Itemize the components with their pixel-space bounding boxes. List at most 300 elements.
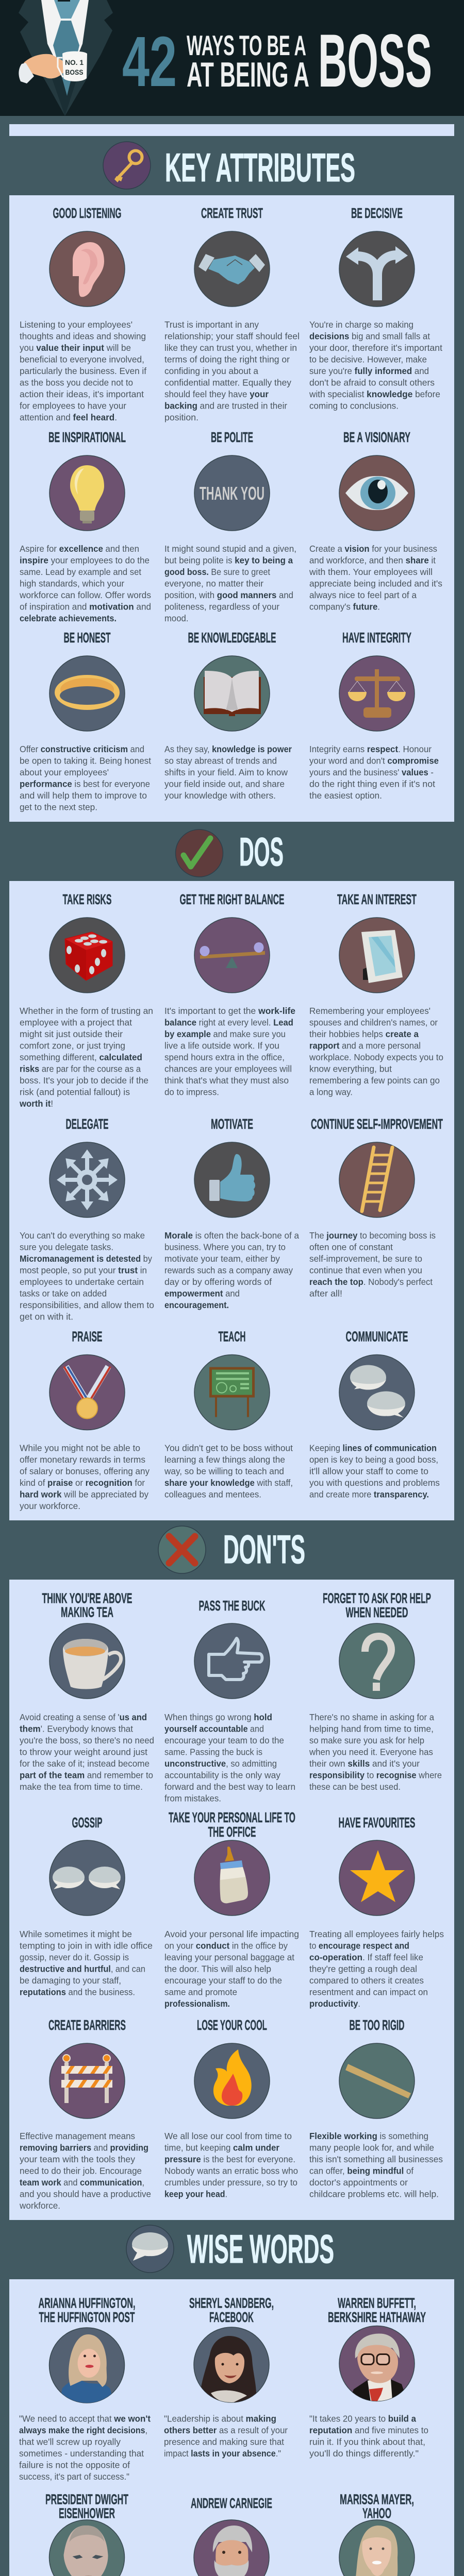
text block: workplace. Nobody expects you to: [309, 1052, 443, 1062]
text block: Avoid your personal life impacting: [164, 1929, 299, 1939]
quote: [164, 2413, 288, 2459]
icon: star: [339, 1840, 415, 1916]
card: delegate: [20, 1116, 154, 1322]
section heading: wise words: [126, 2225, 334, 2273]
text block: by example and make sure you: [164, 1029, 286, 1039]
card: be honest: [20, 630, 151, 812]
text block: [309, 1712, 442, 1792]
text block: empowerment and: [164, 1288, 240, 1298]
text block: appreciate being included and it's: [309, 578, 442, 588]
text block: high standards, which your: [20, 578, 124, 588]
heading: [38, 2295, 135, 2325]
text block: you with questions and problems: [309, 1478, 440, 1488]
heading: WHEN NEEDED: [345, 1604, 408, 1620]
text block: When things go wrong hold: [164, 1712, 272, 1722]
icon: picture frame: [339, 918, 415, 993]
icon: radiating arrows: [49, 1142, 125, 1217]
card: take your personal life to the office: [164, 1809, 299, 2009]
section heading: dos: DOS: [239, 829, 284, 874]
text block: company's future.: [309, 602, 380, 612]
text block: offer monetary rewards in terms: [20, 1454, 145, 1465]
card: motivate: [164, 1116, 299, 1310]
text block: [164, 1230, 299, 1310]
text block: [20, 744, 151, 812]
text block: You're in charge so making: [309, 319, 413, 330]
text block: most people, so put your trust in: [20, 1265, 147, 1276]
text block: and will help them to improve to: [20, 790, 147, 801]
portrait: [339, 2326, 415, 2402]
heading: EISENHOWER: [59, 2505, 115, 2521]
text block: like they can trust you, whether in: [164, 343, 297, 353]
text block: the easiest option.: [309, 790, 382, 801]
text block: decisions big and small falls at: [309, 331, 430, 341]
text block: backing and are trusted in their: [164, 401, 287, 411]
portrait: [194, 2327, 269, 2403]
text block: your team with the tools they: [20, 2154, 135, 2164]
text block: responsibility to recognise where: [309, 1770, 442, 1781]
quote: always make the right decisions,: [19, 2425, 147, 2435]
text block: on your conduct in the office by: [164, 1940, 288, 1951]
text block: performance is best for everyone: [20, 779, 150, 789]
text block: way, so be willing to teach and: [164, 1466, 284, 1477]
icon: flame: [194, 2043, 270, 2119]
illustration: boss in suit holding mug: NO. 1: [65, 58, 84, 66]
text block: Keeping lines of communication: [309, 1443, 437, 1453]
text block: Micromanagement is detested by: [20, 1253, 152, 1264]
text block: reputations and the business.: [20, 1987, 135, 1997]
heading: FACEBOOK: [209, 2309, 254, 2325]
text block: unconstructive, so admitting: [164, 1758, 277, 1769]
heading: [169, 1809, 295, 1840]
card: teach: TEACH: [219, 1328, 245, 1345]
text block: of inspiration and motivation and: [20, 602, 151, 612]
text block: as the boss you decide not to: [20, 377, 133, 387]
quote: others better as a result of your: [164, 2425, 288, 2435]
icon: open book: [194, 656, 270, 731]
text block: to throw your weight around just: [20, 1747, 147, 1757]
text block: Offer constructive criticism and: [20, 744, 144, 754]
text block: beneficial to everyone involved,: [20, 354, 144, 365]
text block: resentment and can impact on: [309, 1987, 428, 1997]
text block: open is key to being a good boss,: [309, 1454, 438, 1465]
text block: position.: [164, 412, 198, 422]
text block: celebrate achievements.: [20, 613, 117, 623]
text block: for the sake of it; instead become: [20, 1758, 150, 1769]
text block: make the tea from time to time.: [20, 1782, 143, 1792]
text block: leaving your personal baggage at: [164, 1952, 294, 1962]
quote: that we'll screw up royally: [19, 2437, 121, 2447]
text block: their own skills and it's your: [309, 1758, 420, 1769]
text block: childcare problems etc. will help.: [309, 2189, 439, 2199]
text block: for employees to have your: [20, 401, 126, 411]
icon: thank you: THANK YOU: [200, 483, 264, 504]
card: pass the buck: [164, 1598, 295, 1803]
card: get the right balance: [164, 891, 295, 1097]
text block: your knowledge with others.: [164, 790, 276, 801]
text block: your workforce.: [20, 1501, 80, 1511]
text block: good boss. Be sure to greet: [164, 567, 270, 577]
card: arianna huffington: [19, 2295, 151, 2482]
text block: confidential matter. Equally they: [164, 377, 291, 387]
icon: balance seesaw: [194, 918, 270, 993]
text block: do to impress.: [164, 1087, 219, 1097]
card: dwight eisenhower: [45, 2494, 128, 2576]
text block: [164, 2131, 298, 2199]
text block: There's no shame in asking for a: [309, 1712, 434, 1722]
text block: spend hours extra in the office,: [164, 1052, 285, 1062]
icon: question mark: [339, 1623, 415, 1699]
card: be a visionary: [309, 429, 442, 612]
text block: [20, 1443, 150, 1511]
icon: tea cup: [49, 1623, 125, 1699]
text block: It might sound stupid and a given,: [164, 544, 296, 554]
text block: position, with good manners and: [164, 590, 293, 600]
text block: and you should have a productive: [20, 2189, 151, 2199]
card: pass the buck: PASS THE BUCK: [199, 1598, 265, 1614]
text block: their hobbies helps create a: [309, 1029, 419, 1039]
text block: Effective management means: [20, 2131, 135, 2141]
icon: ear: [49, 231, 125, 307]
text block: this isn't something all businesses: [309, 2154, 443, 2164]
text block: Morale is often the back-bone of a: [164, 1230, 299, 1241]
text block: Avoid creating a sense of 'us and: [20, 1712, 147, 1722]
text block: action their ideas, it's important: [20, 389, 144, 399]
text block: encouragement.: [164, 1300, 229, 1310]
card: teach: [164, 1328, 293, 1499]
text block: While you might not be able to: [20, 1443, 140, 1453]
heading: [189, 2295, 274, 2325]
text block: attention and feel heard.: [20, 412, 117, 422]
text block: day or by offering words of: [164, 1277, 272, 1287]
text block: these can be best used.: [309, 1782, 401, 1792]
text block: balance right at every level. Lead: [164, 1017, 293, 1027]
icon: ladder: [339, 1142, 415, 1217]
card: gossip: GOSSIP: [72, 1815, 102, 1831]
icon: thank you: [194, 455, 270, 531]
icon: speech bubble: [126, 2225, 174, 2273]
text block: workforce can follow. Offer words: [19, 590, 151, 600]
card: communicate: [309, 1328, 440, 1499]
portrait: [49, 2328, 125, 2404]
card: motivate: MOTIVATE: [211, 1116, 253, 1132]
quote: "We need to accept that we won't: [19, 2413, 151, 2424]
quote: "It takes 20 years to build a: [309, 2413, 416, 2424]
text block: same. Lead by example and set: [20, 567, 141, 577]
heading: MAKING TEA: [61, 1604, 113, 1620]
icon: eye: [339, 455, 415, 531]
text block: [309, 2131, 443, 2199]
text block: should feel they have your: [164, 389, 269, 399]
card: continue self-improvement: [309, 1116, 443, 1298]
text block: [309, 1230, 436, 1298]
text block: [20, 1230, 154, 1322]
text block: your word and don't compromise: [309, 755, 439, 766]
icon: thumbs up: [194, 1142, 270, 1217]
heading: [42, 1590, 132, 1620]
text block: encourage your team to do the: [164, 1735, 284, 1745]
text block: While sometimes it might be: [20, 1929, 132, 1939]
text block: helping hand from time to time,: [309, 1724, 434, 1734]
text block: same. Passing the buck is: [164, 1747, 262, 1757]
text block: Flexible working is something: [309, 2131, 428, 2141]
title: WAYS TO BE A: [187, 29, 306, 61]
text block: [20, 1712, 154, 1792]
text block: [164, 1443, 293, 1499]
text block: Remembering your employees': [309, 1006, 430, 1016]
panel: key attributes: [9, 195, 454, 822]
card: praise: [20, 1328, 150, 1511]
section heading: don'ts: DON'TS: [223, 1527, 305, 1572]
text block: [309, 544, 442, 612]
heading: THINK YOU'RE ABOVE: [42, 1590, 132, 1606]
icon: check mark: [175, 829, 223, 877]
icon: blackboard: [194, 1355, 270, 1430]
title: AT BEING A: [187, 55, 309, 94]
text block: team work and communication,: [20, 2177, 144, 2188]
illustration: boss in suit holding mug: [19, 0, 113, 116]
card: be inspirational: BE INSPIRATIONAL: [48, 429, 126, 445]
text block: [19, 544, 151, 623]
card: be too rigid: [309, 2017, 443, 2199]
text block: might sit just outside their: [20, 1029, 123, 1039]
header banner: [0, 0, 464, 116]
text block: We all lose our cool from time to: [164, 2131, 292, 2141]
text block: live a life outside work. If you: [164, 1041, 279, 1051]
text block: self-improvement, be sure to: [309, 1253, 422, 1264]
text block: yours and the business' values -: [309, 767, 434, 777]
card: be too rigid: BE TOO RIGID: [350, 2017, 404, 2033]
text block: tempting to join in with idle office: [20, 1940, 153, 1951]
icon: forked arrows: [339, 231, 415, 307]
text block: thoughts and ideas and showing: [20, 331, 146, 341]
text block: encourage your staff to do the: [164, 1975, 282, 1986]
text block: confiding in you about a: [164, 366, 258, 376]
illustration: boss in suit holding mug: BOSS: [65, 68, 84, 76]
text block: The journey to becoming boss is: [309, 1230, 436, 1241]
text block: professionalism.: [164, 1998, 230, 2009]
card: good listening: [20, 205, 146, 422]
heading: [328, 2295, 426, 2325]
text block: you're the boss, so there's no need: [20, 1735, 154, 1745]
text block: worth it!: [19, 1098, 53, 1109]
card: gossip: [20, 1815, 153, 1997]
heading: ARIANNA HUFFINGTON,: [38, 2295, 135, 2311]
text block: something different, calculated: [20, 1052, 142, 1062]
text block: doctor's appointments or: [309, 2177, 408, 2188]
card: marissa mayer: [339, 2494, 415, 2576]
text block: crumbles under pressure, so try to: [164, 2177, 297, 2188]
card: be decisive: [309, 205, 442, 411]
card: have integrity: [309, 630, 439, 801]
text block: It's important to get the work-life: [164, 1006, 295, 1016]
text block: a long way.: [309, 1087, 353, 1097]
card: be honest: BE HONEST: [64, 630, 110, 646]
text block: gossip, never do it. Gossip is: [20, 1952, 129, 1962]
quote: [19, 2413, 151, 2482]
quote: ruin it. If you think about that,: [309, 2437, 425, 2447]
quote: success, it's part of success.": [19, 2471, 129, 2482]
text block: [19, 2131, 151, 2211]
text block: spouses and children's names, or: [309, 1017, 438, 1027]
text block: continue that even when you: [309, 1265, 422, 1276]
text block: need to do their job. Encourage: [20, 2166, 142, 2176]
icon: speech bubbles: [339, 1355, 415, 1430]
text block: tasks or take on added: [20, 1288, 107, 1298]
text block: get on with it.: [20, 1312, 73, 1322]
panel: don'ts: [9, 1580, 454, 2220]
icon: road barrier: [49, 2043, 125, 2119]
text block: they're getting a rough deal: [309, 1964, 417, 1974]
panel: wise words: [9, 2279, 454, 2576]
text block: workforce.: [19, 2200, 60, 2211]
icon: medal: [49, 1355, 125, 1430]
text block: [164, 1006, 295, 1097]
text block: reach the top. Nobody's perfect: [309, 1277, 433, 1287]
text block: risks are par for the course as a: [20, 1063, 141, 1074]
text block: to be decisive. However, make: [309, 354, 427, 365]
heading: THE HUFFINGTON POST: [39, 2309, 135, 2325]
section heading: wise words: WISE WORDS: [187, 2226, 334, 2272]
text block: everyone, no matter their: [164, 578, 263, 588]
card: be polite: BE POLITE: [211, 429, 253, 445]
card: take risks: TAKE RISKS: [63, 891, 111, 907]
text block: Integrity earns respect. Honour: [309, 744, 432, 754]
card: communicate: COMMUNICATE: [345, 1328, 408, 1345]
heading: THE OFFICE: [208, 1824, 256, 1840]
text block: responsibilities, and allow them to: [20, 1300, 154, 1310]
text block: rewards such as a company away: [164, 1265, 293, 1276]
text block: remembering a few points can go: [309, 1075, 440, 1086]
text block: productivity.: [309, 1998, 360, 2009]
icon: pointing hand: [194, 1623, 270, 1699]
text block: with them. Your employees will: [309, 567, 433, 577]
hand: [24, 54, 64, 78]
card: be knowledgeable: [164, 630, 292, 801]
text block: comfort zone, or just trying: [20, 1041, 125, 1051]
text block: [164, 744, 292, 801]
text block: part of the team and remember to: [20, 1770, 153, 1781]
card: get the right balance: GET THE RIGHT BALANCE: [179, 891, 285, 907]
card: andrew carnegie: ANDREW CARNEGIE: [191, 2495, 272, 2511]
text block: risk (and potential fallout) is: [20, 1087, 130, 1097]
text block: Treating all employees fairly helps: [309, 1929, 444, 1939]
text block: same and promote: [164, 1987, 237, 1997]
icon: red cross: [158, 1526, 206, 1573]
text block: Whether in the form of trusting an: [20, 1006, 153, 1016]
text block: don't be afraid to consult others: [309, 377, 435, 387]
quote: impact lasts in your absence.": [164, 2448, 281, 2459]
section heading: don'ts: [158, 1526, 305, 1573]
card: be decisive: BE DECISIVE: [351, 205, 403, 221]
text block: business. Where you can, try to: [164, 1242, 286, 1252]
text block: your door, therefore it's important: [309, 343, 442, 353]
text block: can offer, being mindful of: [309, 2166, 413, 2176]
text block: many people look for, and while: [309, 2142, 434, 2153]
text block: know everything, but: [309, 1063, 392, 1074]
quote: "Leadership is about making: [164, 2413, 276, 2424]
heading: TAKE YOUR PERSONAL LIFE TO: [169, 1809, 295, 1825]
text block: [309, 744, 439, 801]
text block: you value their input will be: [20, 343, 131, 353]
title: 42: [122, 22, 177, 101]
text block: when you need it. Everyone has: [309, 1747, 433, 1757]
card: be a visionary: BE A VISIONARY: [343, 429, 410, 445]
text block: Create a vision for your business: [309, 544, 437, 554]
text block: be damaging to your staff,: [20, 1975, 121, 1986]
text block: learning a few things along the: [164, 1454, 285, 1465]
text block: share your knowledge with staff,: [164, 1478, 293, 1488]
text block: after all!: [309, 1288, 342, 1298]
icon: scales: [339, 656, 415, 731]
text block: rapport and a more personal: [309, 1041, 421, 1051]
section heading: key attributes: [103, 142, 355, 190]
text block: motivate your team, either by: [164, 1253, 280, 1264]
heading: [45, 2492, 128, 2521]
text block: get to the next step.: [20, 802, 97, 812]
text block: mood.: [164, 613, 189, 623]
card: lose your cool: [164, 2017, 298, 2199]
card: be polite: [164, 429, 296, 623]
card: forget to ask for help: [309, 1590, 442, 1792]
heading: [323, 1590, 431, 1620]
text block: relationship; your staff should feel: [164, 331, 300, 341]
heading: YAHOO: [362, 2505, 391, 2521]
text block: colleagues and mentees.: [164, 1489, 261, 1499]
card: warren buffett: [309, 2295, 428, 2459]
text block: As they say, knowledge is power: [164, 744, 292, 754]
text block: often one of constant: [309, 1242, 393, 1252]
text block: [164, 319, 300, 422]
portrait: [194, 2520, 269, 2576]
card: create trust: [164, 205, 300, 422]
text block: them'. Everybody knows that: [20, 1724, 133, 1734]
portrait: [49, 2520, 125, 2576]
text block: be open to taking it. Being honest: [20, 755, 151, 766]
card: have integrity: HAVE INTEGRITY: [342, 630, 411, 646]
text block: of salary or bonuses, offering any: [20, 1466, 150, 1477]
text block: chances are your employees will: [164, 1063, 292, 1074]
heading: SHERYL SANDBERG,: [189, 2295, 274, 2311]
text block: to encourage respect and: [309, 1940, 409, 1951]
card: andrew carnegie: [191, 2498, 272, 2576]
card: delegate: DELEGATE: [66, 1116, 108, 1132]
quote: reputation and five minutes to: [309, 2425, 428, 2435]
card: praise: PRAISE: [72, 1328, 102, 1345]
text block: but being polite is key to being a: [164, 555, 293, 566]
text block: time, but keeping calm under: [164, 2142, 279, 2153]
text block: hard work will be appreciated by: [20, 1489, 148, 1499]
portrait: [339, 2520, 415, 2576]
icon: red die: [49, 918, 125, 993]
text block: the door. This will also help: [164, 1964, 271, 1974]
text block: [164, 544, 296, 623]
card: create barriers: CREATE BARRIERS: [48, 2017, 126, 2033]
text block: removing barriers and providing: [20, 2142, 148, 2153]
quote: sometimes - understanding that: [19, 2448, 144, 2459]
text block: [309, 319, 442, 411]
icon: ruler: [339, 2043, 415, 2119]
heading: [340, 2492, 414, 2521]
text block: keep your head.: [164, 2189, 227, 2199]
text block: destructive and hurtful, and can: [20, 1964, 145, 1974]
text block: with specialist knowledge before: [309, 389, 440, 399]
icon: two speech bubbles: [49, 1840, 125, 1916]
text block: [309, 1929, 444, 2009]
mug: [62, 52, 87, 81]
panel: dos: [9, 881, 454, 1520]
card: lose your cool: LOSE YOUR COOL: [197, 2017, 267, 2033]
text block: You can't do everything so make: [20, 1230, 145, 1241]
